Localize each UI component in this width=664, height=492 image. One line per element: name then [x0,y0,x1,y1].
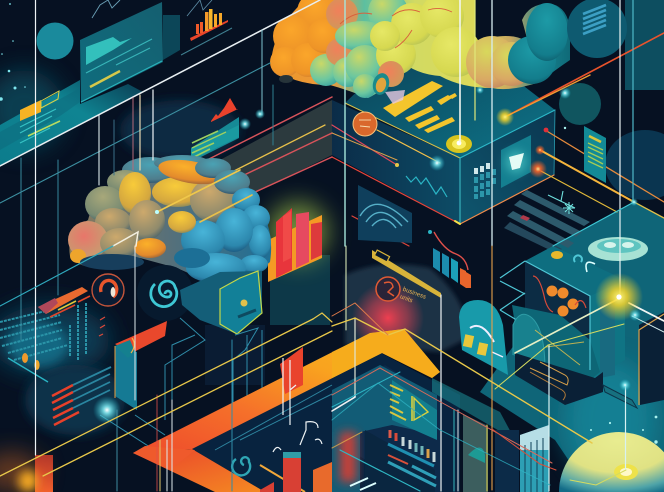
chart: yellow text rows [390,385,406,420]
chart: white score glyphs [273,358,322,452]
cube: left face [332,100,460,224]
icon: small teal swirl and gold rod [232,457,305,492]
cloud: red vein strokes [340,8,452,48]
cube: right glass cube with orange nodes [500,246,664,408]
panel: lower building with dashboards [332,365,549,492]
icons: yellow pill and swirls [551,251,563,259]
card: large teal report [80,2,180,103]
chart: red and blue row list [52,367,111,425]
panel: left isometric data grid [0,287,105,382]
stars [0,3,26,101]
chart: gradient header bar [38,287,88,314]
glow: red wall [340,432,356,482]
cube: central data cube [332,50,555,224]
card: teal list card [584,126,606,183]
chart: red bars bottom [260,452,332,492]
path: orange isometric walkway [133,329,515,492]
icon: teal sparkle branch [548,191,575,214]
panel: document blob top right [567,0,627,58]
icon: pale light beam [385,90,405,104]
icon: red ribbon with teal column [115,321,167,410]
icon: orange badge [376,277,400,301]
chart: red bars beside brain [268,202,328,282]
lines: long diagonal gold and white traces [0,202,664,491]
chart: wavy line on left face [406,176,447,197]
glow: teal lower right [565,360,655,480]
panel: top left teal dashboard band [0,0,232,166]
circle: dark teal orb [559,83,601,125]
dish: glowing bowl top right [588,237,648,261]
chart: yellow bar chart on cube top [383,81,457,133]
cloud: orange lobes [270,0,354,86]
glow: lower left red orange field [0,452,53,492]
icon: teal spiral circle [137,265,193,321]
icon: glowing yellow node on cube [446,135,472,153]
cube: edges [332,103,555,224]
panel: dark base slab [515,353,603,405]
chart: blue stripes [520,425,549,492]
cube: top face [345,50,555,158]
icon: teal dome card [459,300,508,375]
cloud: teal yellow lobes [326,0,464,98]
chart: colored bar rows [365,430,436,492]
chart: blue and orange bars descending [428,230,471,288]
icon: arched window [513,314,545,370]
label: folder caption: business [402,286,427,301]
icon: grid of windows [474,163,496,199]
icon: orange swirl [92,274,124,306]
icon: glowing screen [501,135,531,188]
icon: triangle glyph [414,398,428,420]
icon: teal hexagon shield [180,271,262,334]
brain: highlight streaks [113,170,252,246]
label: folder caption [399,286,427,308]
brain: silhouette base [69,156,271,284]
icon: concentric arc card [358,185,412,243]
cloud: yellow to teal tail [431,3,568,88]
icon: brain stem nozzle [370,71,392,97]
stars: lower right [590,416,658,444]
lines: red and gold diagonal streaks [0,0,664,246]
icon: orange coin [353,112,377,136]
glows: light nodes [239,86,643,391]
panel: gray slats behind brain [205,100,332,198]
orb: large yellow moon bottom right [559,432,664,492]
panel: right tower [639,312,664,405]
panel: folder with red glow [345,250,468,354]
brain: main isometric brain [68,155,271,284]
brain: second brain cloud top [270,0,570,98]
brain: cool right lobes [80,158,271,283]
card: yellow progress widget [20,91,60,143]
brain: upper warm lobes [68,155,238,263]
chart: top sketch lines [92,0,120,18]
lines: thin strokes in walkway interior [215,385,332,450]
cloud: base mass [271,0,570,98]
label: folder caption: units [399,293,414,304]
chart: small red area card [191,98,239,162]
lines: circuit traces under brain [100,318,262,460]
panel: centre dark interior [192,353,460,492]
panel: doorway [463,414,488,492]
cube: right face [460,110,555,224]
icon: teal circle [36,22,74,60]
chart: orange bars top [181,0,232,55]
panel: striped server stack [504,190,590,253]
chart: orange flowers [546,286,578,316]
panel: right isometric teal floor [480,202,664,492]
glow: teal node [93,396,121,424]
